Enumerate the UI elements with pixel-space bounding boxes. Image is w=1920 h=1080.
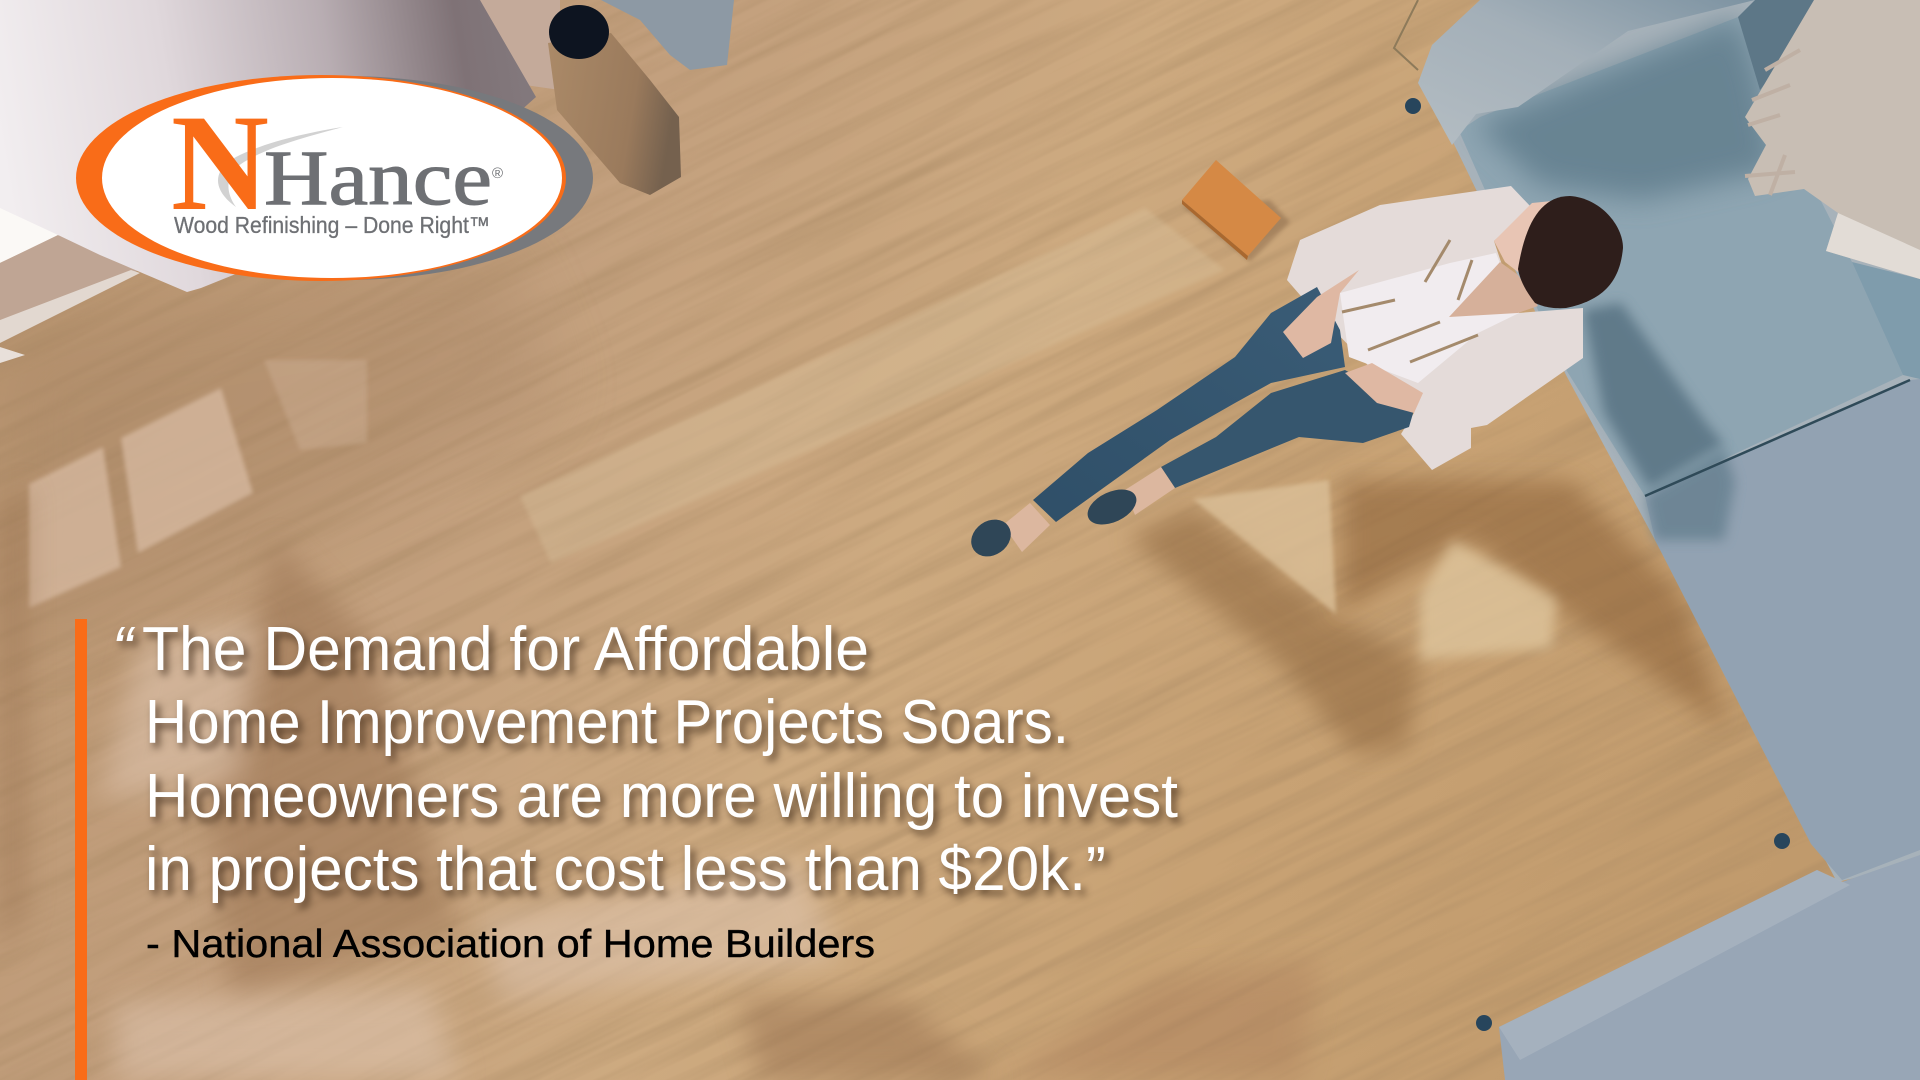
upper hand <box>1283 270 1359 358</box>
right seat section <box>1852 262 1920 379</box>
window light on floor <box>29 360 367 608</box>
sofa back shadow <box>1738 0 1830 90</box>
face <box>1494 200 1562 272</box>
baseboard remnant <box>0 347 25 363</box>
armrest <box>1418 0 1755 145</box>
logo Hance: Hance <box>264 134 492 221</box>
sofa base <box>1452 0 1920 882</box>
orange accent bar <box>75 619 87 1080</box>
blanket fold <box>1826 213 1920 279</box>
upper leg <box>1033 287 1345 522</box>
logo <box>76 75 593 281</box>
floor sunlight triangle <box>1193 480 1336 614</box>
warm lower floor <box>1000 960 1320 1080</box>
ankles <box>1003 467 1175 552</box>
book <box>1182 160 1290 262</box>
cardigan <box>1287 186 1583 470</box>
shirt <box>1340 253 1519 383</box>
logo swoosh <box>218 127 343 207</box>
beige wall <box>0 235 140 320</box>
woman sitting on floor <box>964 186 1623 564</box>
opening quotation mark: “ <box>112 615 136 684</box>
vase <box>548 5 681 195</box>
quote text <box>112 615 1178 904</box>
logo registered mark: ® <box>492 165 503 182</box>
quote line 3: Homeowners are more willing to invest <box>145 762 1178 831</box>
shirt stripes <box>1342 240 1478 362</box>
lower hand <box>1345 363 1423 413</box>
upper seat cushion <box>1459 17 1903 496</box>
quote line 2: Home Improvement Projects Soars. <box>145 688 1069 757</box>
next section highlight <box>1499 870 1850 1060</box>
blanket <box>1745 0 1920 279</box>
baseboard <box>0 270 140 343</box>
logo grey ellipse <box>97 76 593 280</box>
lamp stand <box>1394 0 1418 70</box>
light plank <box>520 208 1225 563</box>
blue curtain right <box>601 0 734 70</box>
soft shadows under quote <box>0 484 1000 1080</box>
attribution: - National Association of Home Builders <box>146 923 875 966</box>
leg shadow on floor <box>1128 507 1420 755</box>
shoes <box>964 482 1142 564</box>
curtains and wall <box>0 0 734 363</box>
torso shadow on floor <box>1342 480 1726 729</box>
sofa feet <box>1405 98 1790 1031</box>
soft pale patches <box>100 620 840 1080</box>
sofa <box>1394 0 1920 1080</box>
hair <box>1518 196 1623 308</box>
seat top shadow <box>1476 17 1775 200</box>
floor sunlight patch <box>1420 541 1557 660</box>
seat person shadow <box>1583 303 1724 489</box>
dim upper-left floor <box>0 250 560 640</box>
logo white ellipse <box>102 78 562 278</box>
logo tagline: Wood Refinishing – Done Right™ <box>174 212 490 238</box>
lower cushion <box>1645 379 1920 880</box>
curtain main <box>0 0 536 292</box>
logo orange ellipse <box>76 75 566 281</box>
logo N: N <box>171 86 269 239</box>
neck and chest <box>1449 262 1538 317</box>
lower leg <box>1161 370 1414 488</box>
wall strip behind vase <box>475 0 560 90</box>
floor lighting <box>0 208 1726 1080</box>
quote line 1: The Demand for Affordable <box>142 615 869 684</box>
bright window strip <box>0 200 60 263</box>
cushion seam <box>1645 380 1910 496</box>
quote line 4: in projects that cost less than $20k.” <box>145 835 1106 904</box>
lower cushion shadow <box>1645 448 1735 540</box>
blanket body <box>1745 0 1920 279</box>
next sofa section <box>1499 855 1920 1080</box>
blanket fringe <box>1745 50 1800 195</box>
